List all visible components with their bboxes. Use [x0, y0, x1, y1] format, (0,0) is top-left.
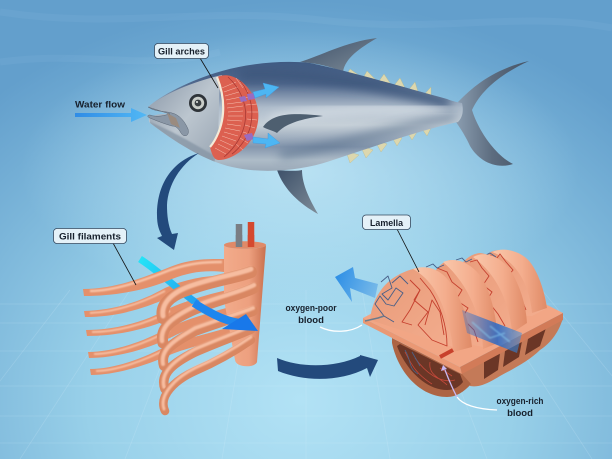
tail fin — [456, 61, 529, 166]
chart: gill filaments — [83, 222, 266, 411]
pointer: oxygen-rich blood — [441, 365, 497, 410]
rear filaments lower — [84, 275, 250, 375]
arrow: water through filaments, upper part — [140, 259, 240, 323]
vessel stubs — [239, 235, 251, 247]
pectoral fin — [263, 114, 323, 133]
lamella structure — [363, 250, 563, 397]
label: lamella: Lamella — [370, 218, 404, 229]
arch 1 rim — [413, 267, 472, 352]
label: oxygen-poor blood — [286, 303, 337, 326]
leader line: gill arches — [200, 58, 218, 88]
icon: second dorsal and anal finlets — [346, 69, 432, 163]
label: gill filaments: Gill filaments — [59, 231, 121, 242]
pointer: oxygen-poor blood — [320, 325, 362, 331]
blue gill arrows — [253, 83, 280, 148]
arrow: filaments to lamella — [277, 355, 378, 379]
gill arches — [210, 75, 258, 160]
arch 2 — [425, 260, 498, 349]
vessel: red — [248, 222, 254, 247]
label: gill arches — [154, 44, 208, 58]
blood vessels arch 1 — [365, 276, 447, 346]
arrow: water leaving lamella — [335, 267, 378, 302]
body shading — [148, 75, 455, 168]
plate right edge — [460, 313, 563, 374]
arrow: fish to filaments — [157, 153, 199, 250]
label: oxygen-rich blood — [496, 396, 544, 419]
plate front edge — [363, 318, 462, 374]
central gill arch cylinder — [224, 245, 266, 366]
pectoral lower fin — [277, 170, 318, 214]
mouth — [148, 107, 188, 136]
arch 4 — [470, 250, 547, 316]
arrow: water flow — [75, 108, 147, 122]
purple vessels — [239, 93, 255, 141]
flow stripe highlights — [472, 322, 510, 342]
gill cover edge — [210, 77, 223, 147]
icon: tuna fish — [148, 38, 529, 214]
flow stripe — [462, 310, 522, 353]
arch 3 — [450, 253, 527, 333]
cylinder top — [224, 241, 266, 249]
fish body — [148, 62, 463, 171]
leader line: gill filaments — [113, 243, 136, 285]
label: oxygen-rich blood: blood — [507, 408, 533, 419]
lower discs — [392, 318, 563, 397]
vessel ends — [440, 350, 453, 357]
leader line: lamella — [397, 229, 419, 272]
label: lamella — [362, 215, 410, 230]
vessel: grey — [236, 224, 242, 247]
label: gill filaments — [54, 228, 126, 244]
plate top — [363, 264, 563, 367]
rear filament top — [83, 259, 224, 296]
arrow: water through filaments, lower part and head — [194, 303, 258, 331]
arch 1 face — [370, 268, 453, 347]
rear filament top highlight — [90, 262, 222, 291]
label: oxygen-rich blood: oxygen-rich — [496, 396, 544, 407]
dorsal fin — [300, 38, 377, 72]
label: oxygen-poor blood: blood — [298, 315, 324, 326]
eye — [189, 94, 207, 112]
label: water flow: Water flow — [75, 100, 126, 110]
front filaments — [162, 269, 254, 411]
label: oxygen-poor blood: oxygen-poor — [286, 303, 337, 314]
label: gill arches: Gill arches — [158, 46, 205, 57]
